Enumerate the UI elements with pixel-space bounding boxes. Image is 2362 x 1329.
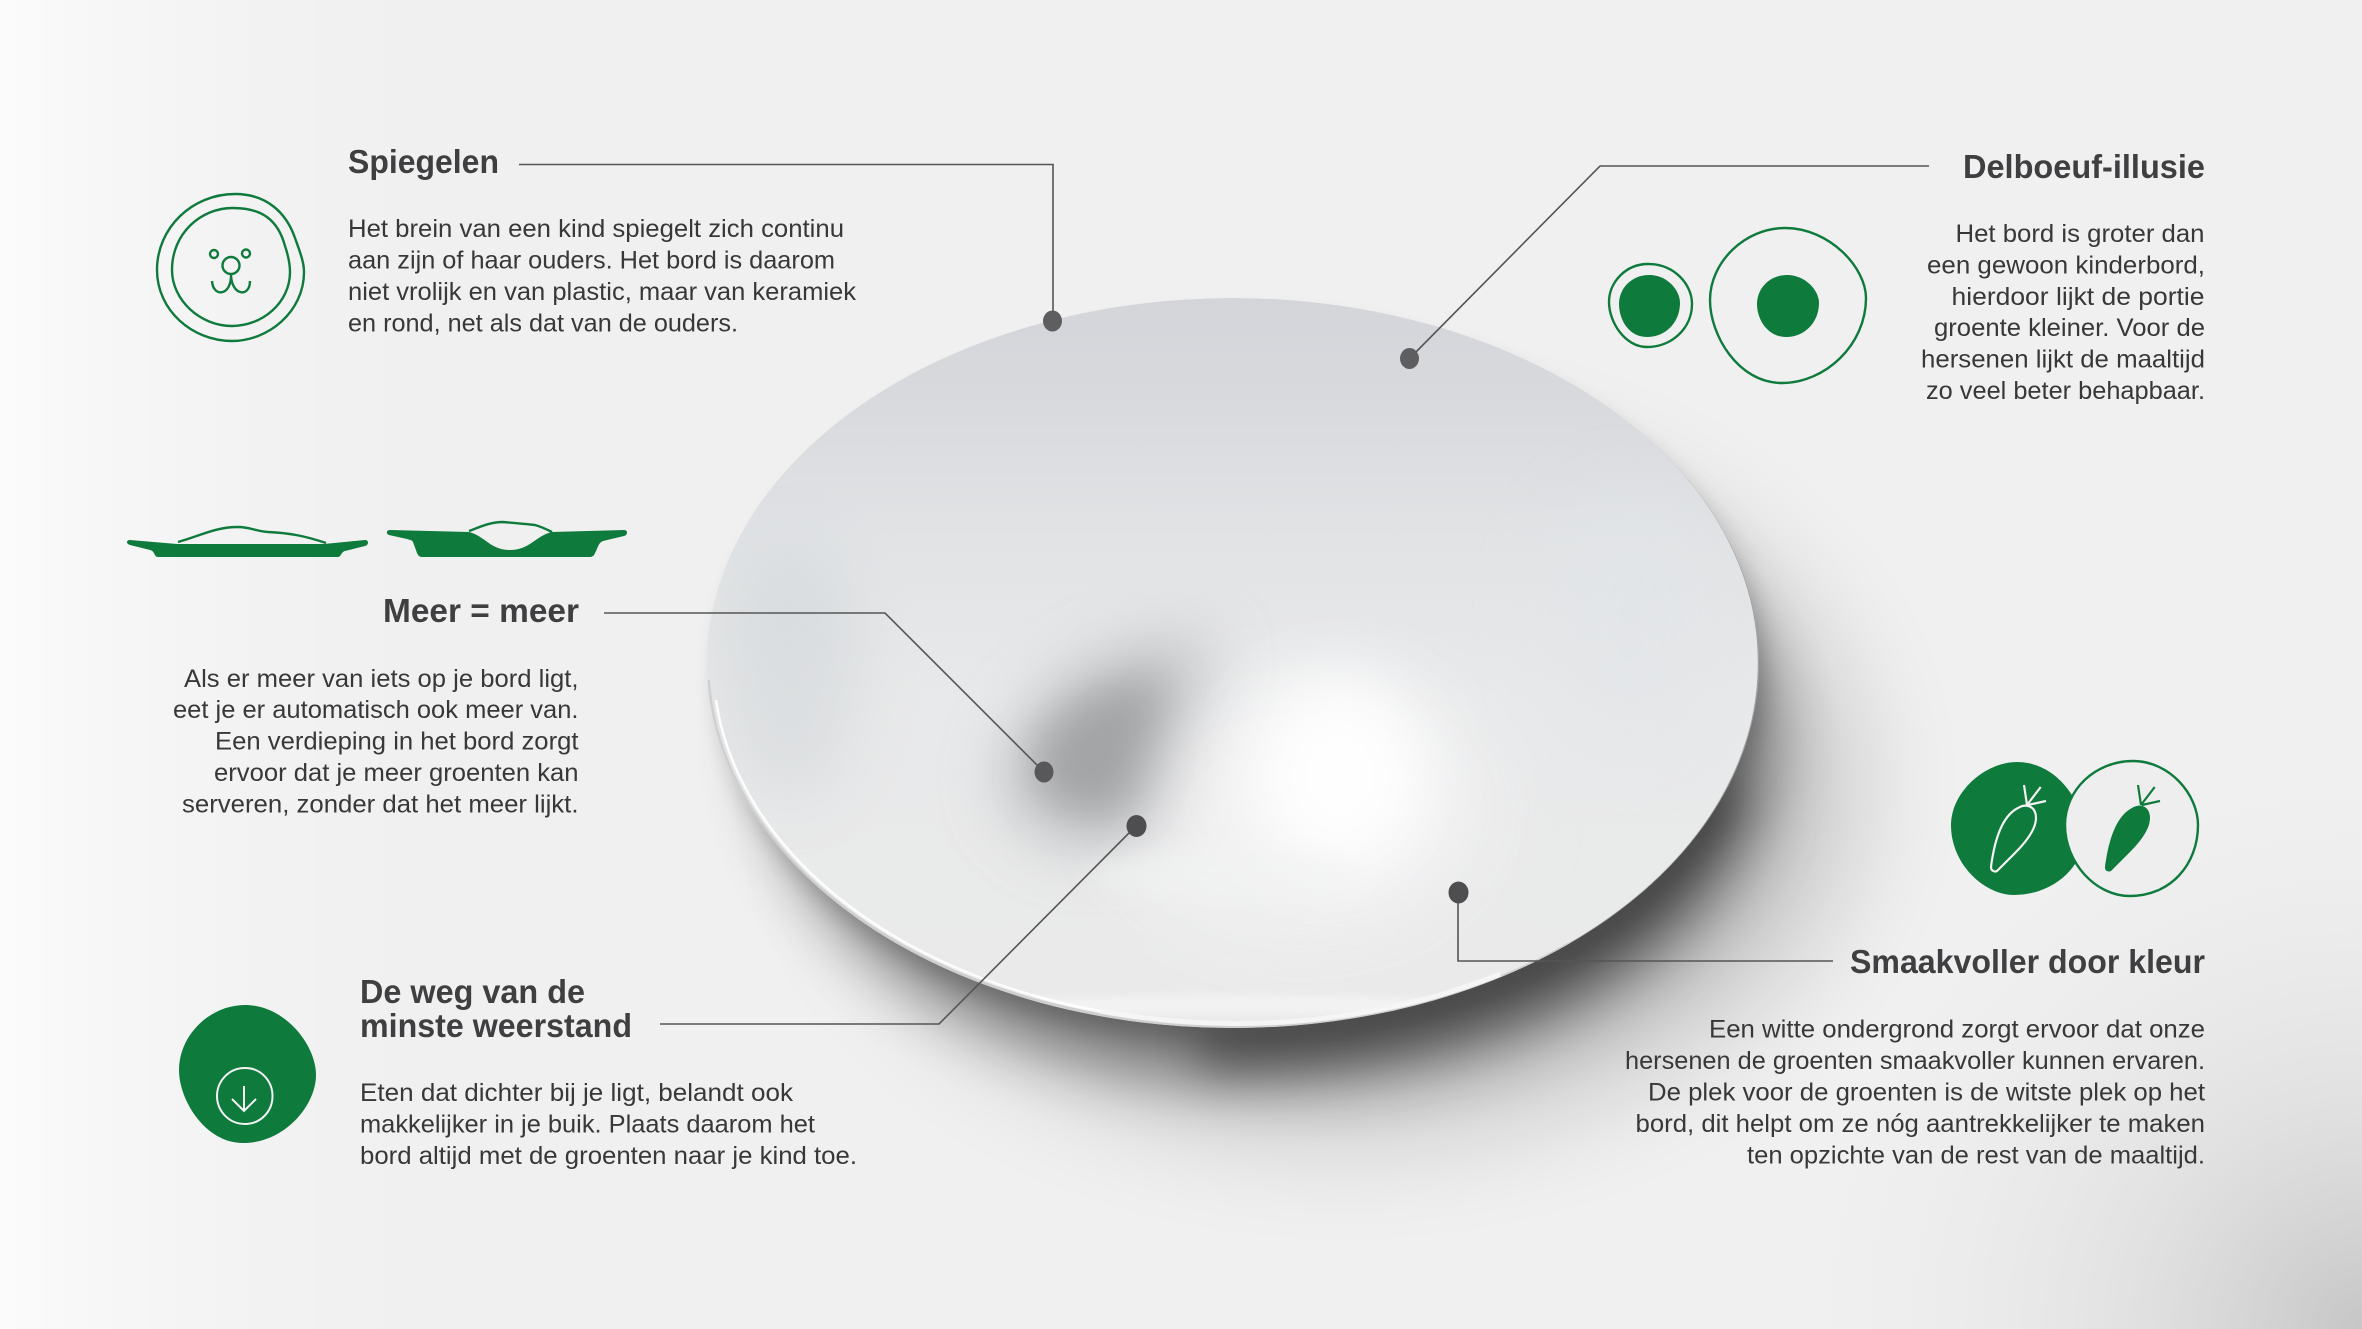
heading: Smaakvoller door kleur: Smaakvoller door kleur [1850, 943, 2205, 980]
panel: Spiegelen [157, 143, 856, 341]
text line: groente kleiner. Voor de [1934, 314, 2205, 342]
panel: Meer = meer [127, 522, 627, 818]
text line: hersenen de groenten smaakvoller kunnen ervaren. [1625, 1047, 2205, 1075]
text line: makkelijker in je buik. Plaats daarom het [360, 1110, 815, 1138]
text line: Een verdieping in het bord zorgt [215, 728, 579, 756]
icon: flat plate cross-section [127, 527, 368, 557]
text line: Een witte ondergrond zorgt ervoor dat onze [1709, 1016, 2205, 1044]
text line: Als er meer van iets op je bord ligt, [184, 665, 578, 693]
text line: ervoor dat je meer groenten kan [214, 759, 578, 787]
text line: serveren, zonder dat het meer lijkt. [182, 790, 578, 818]
text line: hersenen lijkt de maaltijd [1921, 346, 2205, 374]
icon: small plate with portion [1609, 264, 1692, 347]
heading: Meer = meer: Meer = meer [383, 592, 579, 629]
leader line: Delboeuf-illusie [1400, 166, 1929, 369]
plate shadow [714, 313, 1845, 1125]
text line: Het bord is groter dan [1956, 220, 2204, 248]
plate [707, 298, 1759, 1028]
text line: ten opzichte van de rest van de maaltijd. [1747, 1142, 2205, 1170]
icon: large plate with portion [1710, 228, 1866, 383]
text line: De plek voor de groenten is de witste plek op het [1648, 1078, 2205, 1106]
leader line: Smaakvoller [1448, 882, 1833, 961]
heading line 2: minste weerstand [360, 1007, 632, 1044]
heading line 1: De weg van de [360, 973, 585, 1010]
text line: niet vrolijk en van plastic, maar van keramiek [348, 278, 856, 306]
text line: en rond, net als dat van de ouders. [348, 310, 738, 338]
icon: two carrots on green and white plates [1951, 761, 2198, 896]
heading: Delboeuf-illusie: Delboeuf-illusie [1963, 148, 2205, 185]
heading: Spiegelen: Spiegelen [348, 143, 499, 180]
panel: De weg van de minste weerstand [179, 973, 857, 1170]
icon: plate with dip cross-section [387, 522, 627, 557]
text line: bord altijd met de groenten naar je kind toe. [360, 1142, 857, 1170]
leader line: Spiegelen [519, 164, 1062, 332]
panel: Delboeuf-illusie [1609, 148, 2205, 405]
leader line: De weg [660, 815, 1146, 1024]
text line: bord, dit helpt om ze nóg aantrekkelijker te maken [1636, 1110, 2205, 1138]
text line: een gewoon kinderbord, [1927, 252, 2205, 280]
icon: green blob with arrow [179, 1005, 316, 1143]
text line: zo veel beter behapbaar. [1926, 377, 2205, 405]
text line: eet je er automatisch ook meer van. [173, 696, 578, 724]
leader line: Meer = meer [604, 613, 1054, 782]
icon: bear face on plate [157, 194, 304, 341]
text line: aan zijn of haar ouders. Het bord is daarom [348, 246, 835, 274]
text line: Eten dat dichter bij je ligt, belandt ook [360, 1079, 794, 1107]
text line: Het brein van een kind spiegelt zich continu [348, 215, 844, 243]
panel: Smaakvoller door kleur [1625, 761, 2205, 1170]
text line: hierdoor lijkt de portie [1952, 283, 2204, 311]
